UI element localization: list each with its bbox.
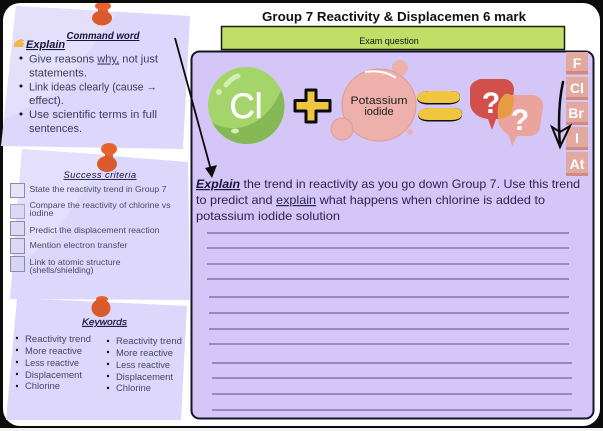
tile: F: F: [573, 55, 582, 71]
checklist: Mention electron transfer: [30, 240, 128, 250]
icon: pin: [92, 3, 112, 26]
arrow: down the group: [552, 82, 570, 147]
icon: question bubbles: [470, 79, 543, 146]
checklist: State the reactivity trend in Group 7: [30, 184, 167, 194]
panel: exam question background: [192, 52, 594, 418]
icon: plus sign: [295, 90, 330, 122]
checklist: Compare the reactivity of chlorine vs: [30, 200, 170, 210]
question text: [196, 177, 580, 223]
text: explain bullets: sentences.: [29, 123, 82, 135]
text: explain bullets: [20, 54, 158, 135]
tile: I: I: [575, 130, 579, 146]
icon: question bubbles: ?: [511, 104, 529, 137]
heading: command word: Command word: [66, 31, 140, 42]
checklist: [10, 184, 170, 275]
icon: question bubbles: ?: [482, 87, 500, 120]
icon: pin: [97, 143, 117, 172]
arrow: command word to question: [175, 38, 217, 178]
keyword list right: Reactivity trend: [116, 336, 182, 346]
checklist: Link to atomic structure: [30, 257, 121, 267]
keyword list left: Chlorine: [25, 381, 60, 391]
exam question banner: [222, 26, 564, 50]
keyword list left: [16, 334, 91, 391]
heading: keywords: Keywords: [82, 317, 128, 327]
icon: pointing hand: [14, 39, 25, 47]
keyword list left: Displacement: [25, 370, 83, 380]
panel: success criteria note: [10, 143, 190, 300]
keyword list right: Displacement: [116, 372, 174, 382]
keyword list right: More reactive: [116, 348, 173, 358]
icon: pin: [92, 296, 110, 317]
icon: potassium iodide molecule: iodide: [364, 106, 394, 118]
panel: keywords note: [6, 296, 187, 420]
question text: Explain the trend in reactivity as you go down Group 7. Use this trend: [196, 177, 580, 191]
exam question banner: Exam question: [359, 36, 419, 46]
icon: equals: [417, 91, 462, 122]
tile: Br: Br: [568, 105, 584, 121]
text: explain bullets: effect).: [29, 95, 64, 107]
answer lines: [207, 233, 572, 410]
panel: command word note: [1, 3, 190, 149]
keyword list right: [107, 336, 182, 393]
checklist: iodine: [30, 208, 54, 218]
tile: Cl: Cl: [570, 80, 584, 96]
icon: potassium iodide molecule: [331, 60, 416, 141]
keyword list left: Less reactive: [25, 358, 79, 368]
text: explain bullets: Link ideas clearly (cause →: [29, 82, 157, 94]
icon: chlorine atom: Cl: [229, 87, 263, 126]
icon: chlorine atom: [208, 67, 285, 144]
heading: explain: Explain: [26, 39, 65, 51]
checklist: (shells/shielding): [30, 265, 94, 275]
checklist: Predict the displacement reaction: [30, 225, 160, 235]
text: explain bullets: Give reasons why, not just: [29, 54, 158, 66]
keyword list right: Less reactive: [116, 360, 170, 370]
keyword list left: More reactive: [25, 346, 82, 356]
question text: to predict and explain what happens when chlorine is added to: [196, 193, 545, 207]
heading: success criteria: Success criteria: [64, 170, 136, 180]
icon: potassium iodide molecule: Potassium: [350, 95, 408, 107]
keyword list right: Chlorine: [116, 383, 151, 393]
text: explain bullets: statements.: [29, 68, 87, 80]
text: explain bullets: Use scientific terms in full: [29, 109, 157, 121]
title: Group 7 Reactivity & Displacemen 6 mark: [262, 10, 526, 24]
keyword list left: Reactivity trend: [25, 334, 91, 344]
question text: potassium iodide solution: [196, 209, 340, 223]
periodic table: group 7 column: [566, 52, 588, 176]
tile: At: At: [570, 156, 585, 172]
